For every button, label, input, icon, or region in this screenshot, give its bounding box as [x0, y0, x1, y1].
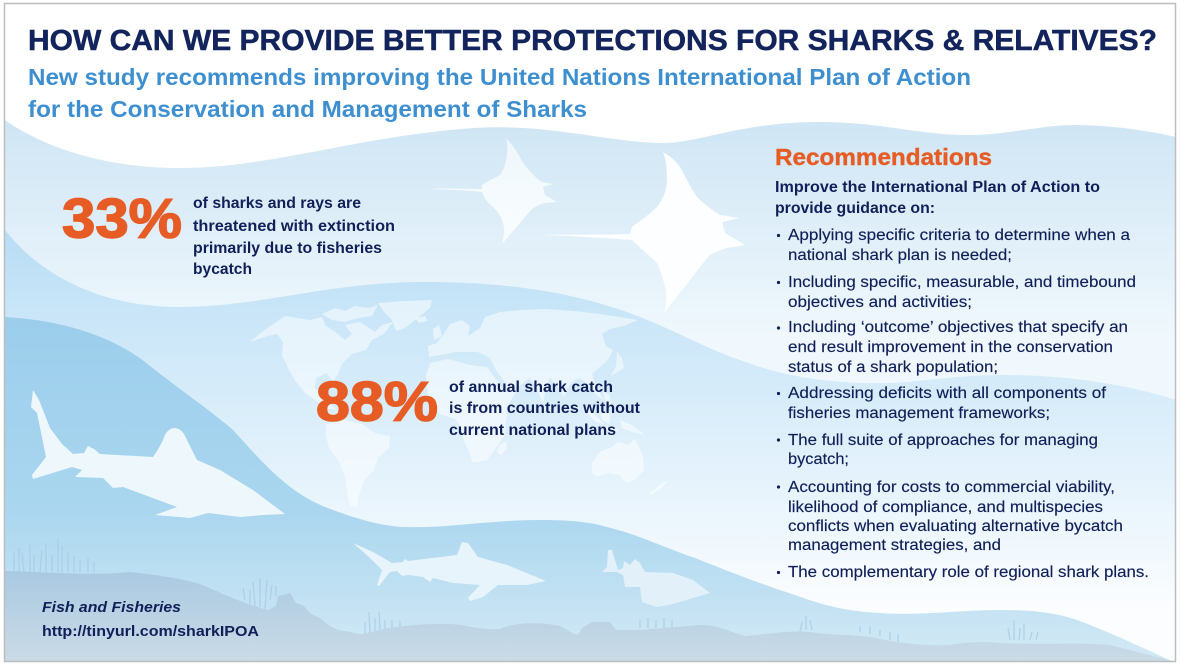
- map: greenland: [378, 300, 432, 331]
- statistic: 33%: 33%: [62, 186, 182, 250]
- statistic: 88%: 88%: [316, 370, 438, 432]
- map: madagascar: [497, 441, 507, 455]
- map: australia: [592, 439, 644, 483]
- statistic text: catch: current national plans: [449, 422, 616, 439]
- recommendations intro: Improve the International Plan of Action to: [775, 179, 1100, 196]
- bottom waves foreground: [5, 538, 1172, 661]
- bullet 6: Accounting for costs to commercial viability,: [788, 479, 1115, 496]
- icon: manta ray large: [543, 152, 745, 313]
- recommendations intro: provide guidance on:: [775, 200, 935, 217]
- world map: [250, 300, 668, 507]
- icon: manta ray small: [430, 138, 557, 244]
- map: iceland: [415, 316, 428, 323]
- map: philippines: [603, 392, 612, 408]
- panel: recommendations: [775, 144, 1149, 581]
- map: south america: [326, 420, 390, 507]
- statistic text: threatened: primarily due to fisheries: [193, 240, 382, 257]
- citation: http://tinyurl.com/sharkIPOA: [42, 624, 260, 640]
- bullet 4: Addressing deficits with all components of: [788, 385, 1107, 402]
- statistic text: catch: is from countries without: [449, 400, 640, 417]
- bullet 3: Including ‘outcome’ objectives that specify an: [788, 319, 1128, 336]
- map: great britain: [433, 325, 442, 340]
- subtitle: [28, 64, 971, 122]
- bullet 6: management strategies, and: [788, 537, 1001, 554]
- statistic text: threatened: of sharks and rays are: [193, 195, 361, 212]
- citation: [42, 600, 260, 640]
- icon: large oceanic whitetip shark: [31, 390, 285, 518]
- bullet 6: likelihood of compliance, and multispecies: [788, 499, 1103, 516]
- bullet 5: bycatch;: [788, 451, 849, 468]
- bullet 4: [777, 385, 1107, 422]
- bullet 7: The complementary role of regional shark plans.: [788, 564, 1149, 581]
- bullet 6: conflicts when evaluating alternative bycatch: [788, 518, 1123, 535]
- seabed reef plants: [14, 538, 1038, 642]
- bullet 3: [777, 319, 1128, 376]
- bullet 3: status of a shark population;: [788, 359, 998, 376]
- title: HOW CAN WE PROVIDE BETTER PROTECTIONS FOR SHARKS & RELATIVES?: [28, 25, 1157, 57]
- statistic text: catch: [449, 379, 640, 439]
- bullet 1: Applying specific criteria to determine when a: [788, 227, 1130, 244]
- recommendations intro: [775, 179, 1100, 217]
- statistic text: threatened: [193, 195, 395, 278]
- bullet 5: [777, 432, 1098, 468]
- bullet 6: [777, 479, 1123, 554]
- statistic text: threatened: bycatch: [193, 261, 252, 278]
- bullet 1: [777, 227, 1130, 264]
- bullet 1: national shark plan is needed;: [788, 247, 1012, 264]
- bullet 2: objectives and activities;: [788, 294, 972, 311]
- subtitle: for the Conservation and Management of Sharks: [28, 96, 587, 122]
- bullet 3: end result improvement in the conservation: [788, 339, 1113, 356]
- statistic text: threatened: threatened with extinction: [193, 218, 395, 235]
- statistic text: catch: of annual shark catch: [449, 379, 613, 396]
- recommendations heading: Recommendations: [775, 144, 992, 170]
- bullet 5: The full suite of approaches for managing: [788, 432, 1098, 449]
- bullet 2: Including specific, measurable, and timebound: [788, 274, 1136, 291]
- icon: small shark: [353, 542, 546, 601]
- map: indonesia and new guinea: [588, 408, 645, 435]
- map: north america: [250, 316, 393, 410]
- map: eurasia: [428, 309, 638, 403]
- map: japan: [611, 352, 624, 376]
- subtitle: New study recommends improving the United Nations International Plan of Action: [28, 64, 971, 90]
- map: africa: [426, 359, 517, 463]
- bullet 4: fisheries management frameworks;: [788, 405, 1050, 422]
- map: new zealand: [649, 481, 668, 496]
- seabed: [5, 571, 1172, 661]
- map: canadian arctic islands: [322, 305, 378, 322]
- bullet 2: [777, 274, 1136, 311]
- icon: wedgefish: [602, 550, 710, 607]
- citation: Fish and Fisheries: [42, 600, 181, 616]
